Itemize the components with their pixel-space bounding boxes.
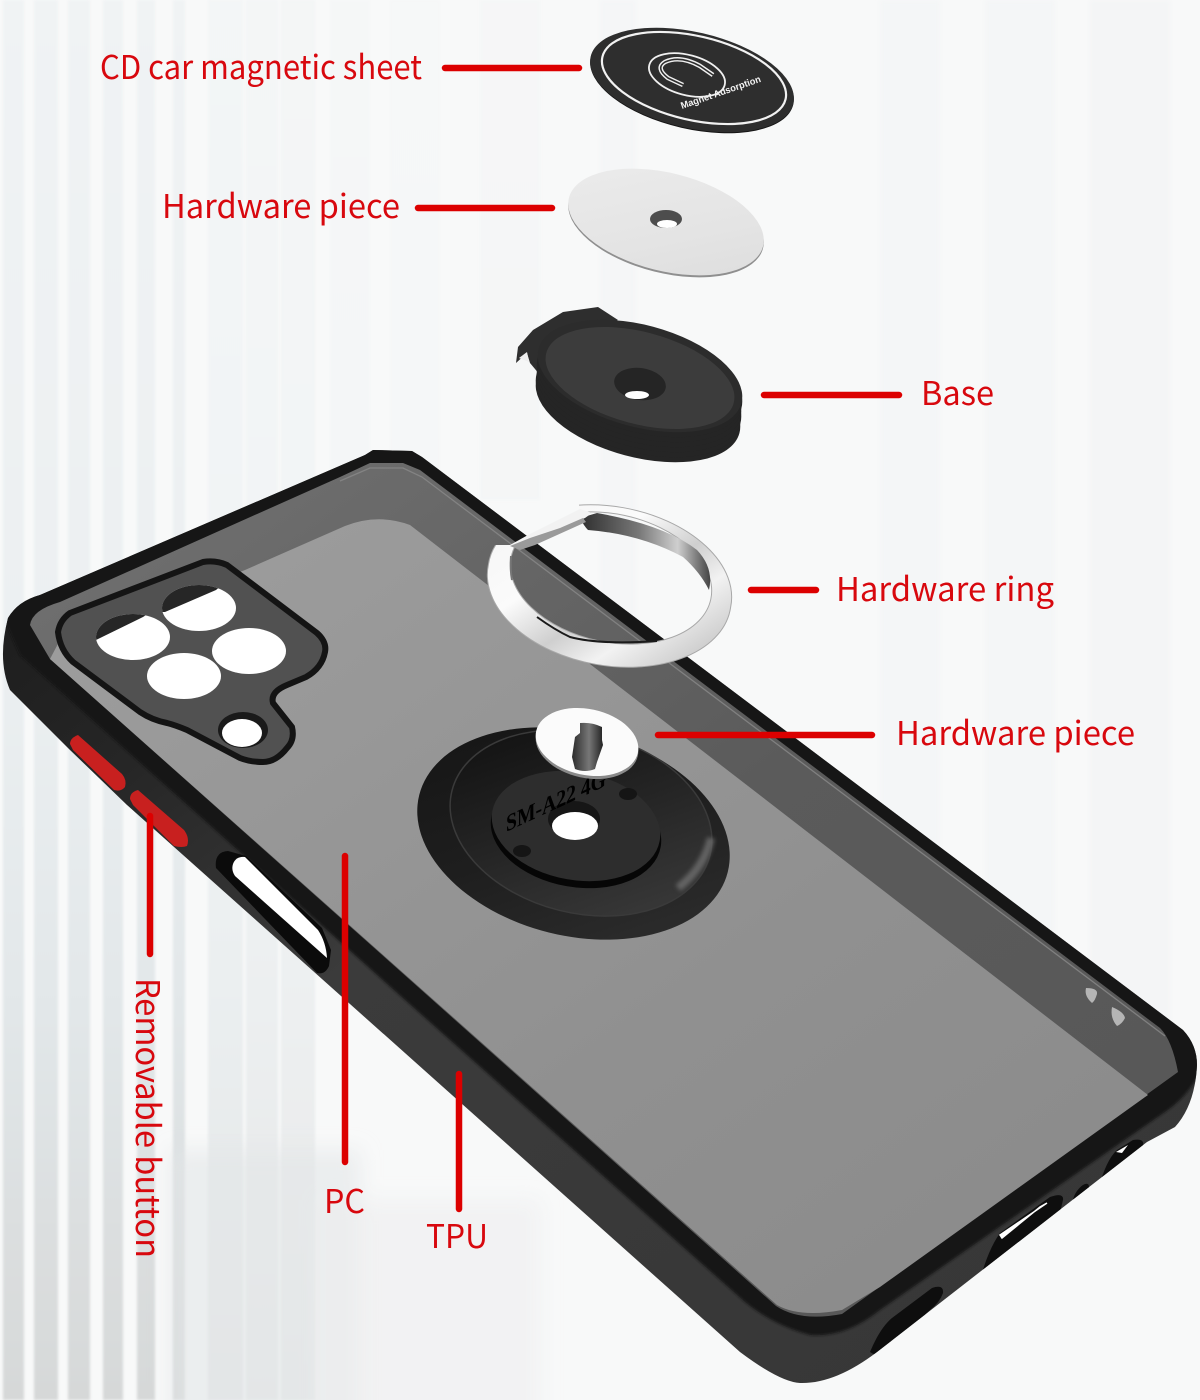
red buttons	[70, 735, 188, 847]
label: CD car magnetic sheet: CD car magnetic sheet	[100, 41, 422, 89]
base	[516, 300, 755, 482]
phone case	[0, 441, 1200, 1383]
CD car magnetic sheet	[580, 10, 804, 151]
ring inner wall	[580, 513, 710, 590]
ring clasp	[510, 509, 592, 548]
label: Hardware piece top: Hardware piece	[162, 180, 400, 228]
icon: magnet	[644, 46, 730, 104]
hardware piece: white disc	[529, 699, 645, 788]
hardware piece: metal disc	[557, 150, 775, 296]
label: PC: PC	[324, 1175, 365, 1223]
label: Base: Base	[921, 367, 994, 415]
TPU outer bumper	[3, 450, 1197, 1383]
rim highlight	[340, 468, 1165, 1036]
interior frame	[30, 463, 1178, 1317]
CD car magnetic sheet: Magnet Adsorption	[679, 74, 763, 112]
camera bump	[58, 561, 325, 762]
inner dark band	[0, 441, 1200, 1335]
label: Removable button: Removable button	[126, 978, 174, 1258]
engraved model text: SM-A22 4G	[506, 765, 606, 837]
ring holder	[395, 696, 752, 971]
label: Hardware ring: Hardware ring	[836, 563, 1054, 611]
PC back panel	[50, 519, 1148, 1313]
bottom ports	[870, 1140, 1143, 1358]
label: Hardware piece lower: Hardware piece	[896, 707, 1135, 755]
window marks	[1086, 988, 1125, 1026]
hardware ring	[487, 505, 732, 667]
label: TPU: TPU	[426, 1210, 488, 1258]
side slot	[216, 851, 331, 973]
